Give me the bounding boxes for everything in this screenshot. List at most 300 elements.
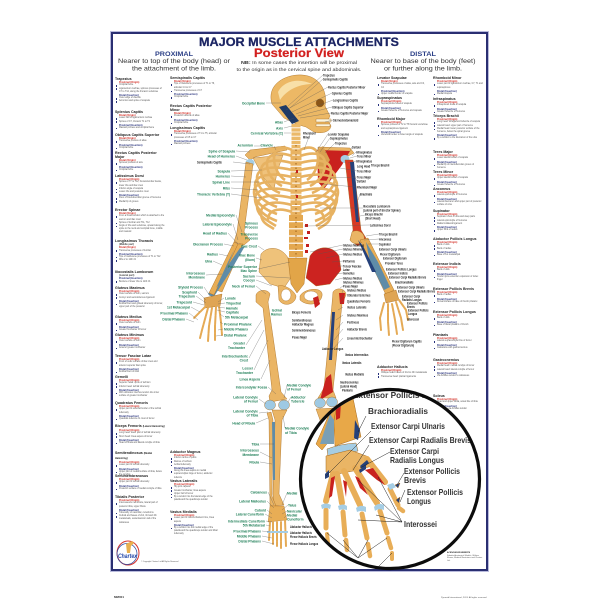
entry: Infraspinatus: Distal (Insertion): [437, 108, 457, 110]
entry: Gemelli: [115, 375, 160, 397]
black muscle labels: Brachioradialis: [395, 280, 414, 285]
black muscle labels: Longus: [408, 312, 418, 316]
entry: Gastrocnemius: [433, 358, 483, 378]
green bone labels, left side: Ribs: [223, 186, 230, 191]
entry: Levator Scapulae: Transverse processes of atlas, axis and C3, C4: [381, 83, 425, 88]
entry: Extensor Pollicis Longus: Distal (Insertion): [437, 320, 457, 324]
heading: proximal: PROXIMAL: [155, 52, 193, 58]
green bone labels, left side: Process: [245, 236, 258, 241]
entry: Biceps Femoris: Short head: linea aspera of femur: [119, 436, 152, 438]
entry: Obliquus Capitis Superior: Obliquus Capitis Superior: [115, 133, 159, 137]
entry: Semitendinosus: Lower part of ischial tuberosity: [119, 464, 149, 466]
black muscle labels: Iliocostalis Lumborum: [363, 204, 391, 209]
entry: Levator Scapulae: Upper medial border of scapula: [381, 93, 412, 95]
entry: Tibialis Posterior: Distal (Insertion): [119, 509, 139, 512]
entry: Teres Major: Medial lip of intertubercular groove of humerus: [437, 164, 474, 169]
printer note: Pyramid International, 2013. All rights reserved.: [441, 596, 487, 599]
heading: proximal: Nearer to top of the body (head) or: [118, 58, 230, 65]
entry: Supraspinatus: Distal (Insertion): [381, 106, 401, 110]
entry: Vastus Medialis: Proximal (Origin): [174, 514, 194, 517]
black muscle labels: Supinator: [379, 242, 392, 247]
entry: Tensor Fasciae Latae: Distal (Insertion): [119, 368, 139, 371]
entry: Vastus Medialis: Lower part of intertrochanteric line, linea aspera: [174, 517, 214, 522]
black muscle labels: Gluteus Minimus: [343, 280, 364, 285]
black muscle labels: [197, 73, 436, 546]
entry: Triceps Brachii: Triceps Brachii: [433, 114, 459, 118]
entry: Infraspinatus: Infraspinous fossa of scapula: [437, 104, 466, 106]
black muscle labels: Rhomboid: [303, 131, 316, 136]
skull: [271, 75, 331, 133]
entry: Obliquus Capitis Superior: [115, 133, 160, 149]
black muscle labels: Levator Scapulae: [328, 132, 349, 137]
black muscle labels: Latissimus Dorsi: [370, 223, 391, 228]
entry: Tensor Fasciae Latae: Front of outer surface of iliac crest and anterior superior iliac spine: [119, 361, 157, 366]
entry: Teres Minor: Greater tubercle of humerus: [437, 184, 465, 186]
green bone labels, left side: Radius: [207, 252, 218, 257]
entry: Semitendinosus: Semitendinosus (Medial Hamstring): [115, 451, 152, 460]
green bone labels, centre: Distal Phalanx: [224, 333, 247, 338]
pelvis: [259, 248, 341, 308]
entry: Tensor Fasciae Latae: [115, 354, 158, 373]
entry: Vastus Lateralis: Hip joint capsule: [174, 486, 191, 488]
green bone labels, centre: of Tibia: [285, 431, 298, 435]
entry: Gluteus Medius: [115, 315, 146, 331]
black muscle labels: Biceps Brachii: [365, 212, 383, 217]
green bone labels, centre: Middle Phalanx: [224, 327, 248, 332]
black muscle labels: Brevis: [407, 305, 415, 309]
entry: Extensor Pollicis Longus: Extensor Pollicis Longus: [433, 310, 476, 314]
green bone labels, left side: 5th Metatarsal: [243, 523, 265, 528]
black muscle labels: Abductor Hallucis: [290, 531, 312, 535]
panel: proximal column one: [115, 77, 178, 566]
entry: Gluteus Minimus: Outer surface of ilium: [119, 340, 140, 342]
entry: Semimembranosus: Upper part of ischial tuberosity: [119, 481, 149, 483]
green bone labels, left side: Humerus: [216, 174, 230, 179]
heading: distal: DISTAL: [410, 52, 436, 58]
entry: Teres Minor: Distal (Insertion): [437, 180, 457, 184]
entry: Vastus Lateralis: Vastus Lateralis: [170, 479, 197, 483]
green bone labels, centre: 5th Metacarpal: [225, 315, 248, 320]
black muscle labels: Biceps Femoris: [292, 310, 311, 315]
black muscle labels: Trapezius: [335, 141, 347, 146]
entry: Longissimus Capitis: [170, 126, 217, 145]
enlarged hand skeleton: [316, 390, 471, 567]
entry: Soleus: [433, 394, 483, 411]
entry: Anconeus: Distal (Insertion): [437, 198, 457, 200]
circle labels: Interossei: [404, 519, 437, 529]
black muscle labels: Extensor Carpi Radialis Brevis: [389, 275, 427, 280]
entry: Iliocostalis Lumborum: (Lateral part): [119, 274, 134, 277]
green bone labels, centre: Capitate: [226, 310, 239, 315]
heading: proximal: the attachment of the limb.: [132, 66, 216, 72]
green bone labels, left side: Calcaneus: [250, 490, 267, 495]
entry: Levator Scapulae: Levator Scapulae: [377, 76, 407, 80]
entry: Supinator: Proximal (Origin): [437, 213, 457, 216]
black muscle labels: Extensor Digitorum: [383, 256, 407, 261]
green bone labels, left side: Atlas: [275, 120, 283, 125]
entry: Gluteus Maximus: Gluteus Maximus: [115, 286, 145, 290]
entry: Longissimus Thoracis: Transverse processes of lumbar: [119, 250, 151, 252]
entry: Gluteus Maximus: Distal (Insertion): [119, 300, 139, 303]
green bone labels, left side: Thoracic Vertebra (T): [197, 192, 231, 197]
left hand: [194, 306, 222, 341]
green bone labels, left side: Iliac Spine: [241, 269, 257, 273]
black muscle labels: Vastus Lateralis: [347, 305, 367, 310]
green bone labels, left side: Interosseus: [186, 271, 205, 276]
entry: Trapezius: Outer edge of clavicle: [119, 97, 141, 99]
green bone labels, centre: Navicular: [287, 509, 302, 514]
entry: Longissimus Thoracis: Distal (Origin): [119, 246, 136, 249]
black muscle labels: Gluteus Medius: [343, 276, 362, 281]
green bone labels, left side: Iliac Crest: [241, 244, 258, 249]
green bone labels, left side: Linea Aspera: [240, 377, 261, 382]
right arm: [345, 160, 399, 303]
entry: Abductor Pollicis Longus: Proximal (Origin): [437, 241, 457, 244]
green bone labels, left side: Intertrochanteric: [222, 354, 248, 359]
magnifier circle: hand detail: [300, 390, 480, 568]
entry: Splenius Capitis: [115, 110, 154, 129]
green bone labels, left side: of Tibia: [246, 413, 259, 418]
copyright: © Copyright Chartex Ltd All Rights Reserved: [141, 561, 178, 563]
entry: Abductor Pollicis Longus: Back of radius: [437, 248, 451, 250]
entry: Splenius Capitis: Mastoid process and occipital bone: [119, 127, 154, 129]
title: MAJOR MUSCLE ATTACHMENTS: [199, 37, 399, 49]
entry: Semispinalis Capitis: [170, 76, 215, 99]
green bone labels, left side: Greater: [233, 341, 246, 346]
green bone labels, left side: Middle Phalanx: [237, 534, 261, 539]
entry: Rectus Capitis Posterior Major: [115, 151, 157, 171]
poster frame: [111, 32, 488, 571]
entry: Tibialis Posterior: Tuberosity of navicular, cuneiforms: [119, 512, 154, 514]
entry: Adductor Magnus: Along the linea aspera to medial supracondylar ridge of femur, adductor tubercle: [174, 470, 213, 479]
black muscle labels: Infraspinatus: [356, 159, 372, 164]
circle labels: Extensor Carpi Radialis Brevis: [369, 435, 471, 445]
black muscle labels: Semispinalis Capitis: [197, 160, 222, 165]
entry: Gluteus Maximus: Proximal (Origin): [119, 290, 139, 293]
panel: distal column two: [433, 76, 483, 562]
entry: Extensor Pollicis Brevis: Distal (Insertion): [437, 298, 457, 300]
entry: Plantaris: Proximal (Origin): [437, 337, 457, 340]
entry: Trapezius: Ligamentum nuchae, spinous processes of C7 to T12, along the thoracic vertebrae: [119, 88, 162, 93]
entry: Teres Minor: Upper lateral border of scapula: [437, 177, 468, 179]
entry: Biceps Femoris: [115, 424, 165, 444]
entry: Tibialis Posterior: Proximal (Origin): [119, 499, 139, 502]
entry: Obliquus Capitis Superior: Transverse process of atlas: [119, 140, 147, 142]
entry: Gemelli: Superior head: spine of ischium: [119, 382, 151, 384]
green bone labels, left side: Trochanter: [236, 371, 254, 375]
black muscle labels: Extensor Carpi Radialis Brevis: [398, 289, 436, 294]
entry: Quadratus Femoris: Distal (Insertion): [119, 415, 139, 418]
black muscle labels: Extensor Pollicis: [408, 308, 429, 313]
entry: Rhomboid Major: Vertebral border to lower angle of scapula: [381, 134, 423, 136]
green bone labels, centre: Proximal Phalanx: [224, 322, 252, 327]
entry: Extensor Indicis: Proximal (Origin): [437, 266, 457, 269]
entry: Supinator: Supinator: [433, 209, 450, 213]
black muscle labels: Semimembranosus: [292, 328, 316, 333]
entry: Quadratus Femoris: Quadratus Femoris: [115, 401, 148, 405]
entry: Soleus: Head and upper fibula, soleal line of tibia: [437, 401, 478, 403]
entry: acknowledgements: Sobotta Anatomical Models, Wolters Kluwer, Medical Illustrators and Chartex Ltd.: [447, 555, 482, 562]
green bone labels, left side: Neck of Femur: [232, 284, 256, 289]
panel: distal column one: [377, 76, 428, 378]
entry: Gluteus Medius: Gluteus Medius: [115, 315, 142, 319]
entry: Vastus Medialis: Distal (Insertion): [174, 524, 194, 527]
circle labels: Radialis Longus: [390, 455, 444, 465]
entry: Semitendinosus: [115, 451, 162, 476]
black muscle labels: Piriformis: [343, 259, 355, 264]
entry: Quadratus Femoris: [115, 401, 161, 420]
entry: Supinator: Supinator crest of ulna and deep parts: [437, 216, 475, 218]
entry: Rhomboid Minor: Lower part of ligamentum nuchae, C7, T1 and supraspinous: [437, 83, 483, 88]
black muscle labels: Adductor Longus: [322, 347, 344, 351]
entry: Teres Major: Teres Major: [433, 150, 453, 154]
entry: Rectus Capitis Posterior Minor: Distal (Origin): [174, 112, 191, 115]
black muscle labels: Tensor Fasciae: [343, 264, 362, 269]
note: [236, 60, 362, 72]
entry: Plantaris: Distal (Insertion): [437, 344, 457, 346]
entry: Quadratus Femoris: Quadrate tubercle on crest of femur: [119, 418, 155, 420]
entry: Adductor Hallucis: Proximal (Origin): [381, 369, 401, 372]
green bone labels, centre: Tubercle: [291, 399, 305, 404]
entry: Abductor Pollicis Longus: Back of ulna: [437, 244, 449, 246]
entry: Vastus Medialis: Vastus Medialis: [170, 510, 197, 514]
black muscle labels: Flexor Digitorum Capitis: [392, 339, 422, 344]
black muscle labels: Extensor Pollicis: [407, 301, 428, 306]
entry: Supinator: Upper third of radius: [437, 229, 457, 231]
entry: Tibialis Posterior: Interosseous membrane, lateral part of posterior tibia, upper fibula: [119, 502, 158, 508]
entry: Rhomboid Minor: Proximal (Origin): [437, 80, 457, 83]
entry: Iliocostalis Lumborum: Borders of lower ribs to 12th rib: [119, 280, 150, 282]
entry: Supinator: Radial collateral ligament: [437, 223, 462, 225]
green bone labels, left side: Lesser: [242, 366, 254, 371]
circle labels: Brevis: [404, 475, 426, 485]
entry: Gemelli: With obturator internus tendon into inner surface of greater trochanter: [119, 392, 159, 397]
entry: Adductor Hallucis: Transverse head: plantar ligaments: [381, 376, 416, 378]
entry: Longissimus Thoracis: (Middle part): [119, 243, 134, 246]
entry: Gemelli: Inferior head: ischial tuberosity: [119, 386, 150, 388]
green bone labels, left side: Occipital Bone: [242, 101, 265, 106]
circle labels: Extensor Carpi Ulnaris: [371, 421, 445, 431]
entry: Rhomboid Major: Distal (Insertion): [381, 131, 401, 134]
entry: Biceps Femoris: Biceps Femoris (Lateral Hamstring): [115, 424, 165, 428]
black muscle labels: Quadratus Femoris: [347, 299, 371, 304]
black muscle labels: Adductor Brevis: [347, 327, 367, 332]
entry: Trapezius: Trapezius: [115, 77, 132, 81]
entry: Vastus Lateralis: By a tendon into the lateral edge of the patella and the quadriceps tendon: [174, 496, 213, 501]
circle labels: [353, 390, 471, 529]
black muscle labels: Extensor Carpi Ulnaris: [379, 247, 407, 252]
left leg: [256, 290, 290, 506]
entry: Latissimus Dorsi: Spines of T7 to T12, thoracolumbar fascia, lower ribs and iliac crest: [119, 181, 161, 186]
entry: Adductor Magnus: [170, 450, 213, 479]
shoulder girdle: [245, 146, 354, 190]
black muscle labels: Gemellus: [343, 271, 355, 276]
entry: Anconeus: Anconeus: [433, 187, 450, 191]
entry: Rectus Capitis Posterior Major: Distal (Origin): [119, 159, 136, 162]
entry: Longissimus Capitis: Longissimus Capitis: [170, 126, 205, 130]
entry: Splenius Capitis: Distal (Origin): [119, 114, 136, 117]
entry: Vastus Lateralis: Upper half of femur: [174, 493, 193, 495]
entry: Latissimus Dorsi: Lower ribs and posterior crest: [119, 191, 149, 193]
green bone labels, left side: Styloid Process: [178, 285, 203, 290]
entry: Longissimus Capitis: Mastoid process: [174, 143, 190, 145]
subtitle: Posterior View: Posterior View: [254, 46, 345, 60]
entry: Gluteus Minimus: Anterior greater trochanter: [119, 347, 145, 349]
entry: Longissimus Thoracis: Longissimus Thoracis: [115, 239, 153, 243]
entry: Teres Major: Lower lateral border of scapula: [437, 157, 468, 159]
black muscle labels: Flexor Hallucis Longus: [290, 542, 318, 546]
green bone labels, left side: Trochanter: [228, 346, 246, 350]
black muscle labels: Minor: [303, 135, 311, 140]
green bone labels, centre: Lunate: [225, 296, 236, 301]
entry: Infraspinatus: [433, 97, 466, 113]
green bone labels, left side: Spine of Scapula: [209, 149, 236, 154]
green bone labels, left side: Ramus: [271, 312, 282, 317]
circle labels: Extensor Pollicis: [404, 466, 460, 476]
skeleton figure: [186, 75, 408, 548]
entry: Rectus Capitis Posterior Minor: Posterior tubercle of atlas: [174, 115, 200, 117]
black muscle labels: Supraspinatus: [330, 136, 348, 141]
entry: Rectus Capitis Posterior Major: Proximal (Insertion): [119, 166, 142, 169]
entry: Soleus: Soleus: [433, 394, 445, 398]
black muscle labels: Gastrocnemius: [340, 380, 359, 385]
black muscle labels: Flexor Digitorum: [380, 252, 401, 257]
entry: Semispinalis Capitis: Occipital bone: [174, 96, 188, 98]
green bone labels, left side: Spinal Line: [212, 180, 230, 185]
entry: Gastrocnemius: Gastrocnemius: [433, 358, 459, 362]
green bone labels, left side: Clavicle: [260, 143, 273, 148]
entry: Longissimus Thoracis: Proximal (Insertion): [119, 253, 142, 256]
entry: Extensor Indicis: Distal (Insertion): [437, 272, 457, 276]
entry: Teres Major: Distal (Insertion): [437, 160, 457, 164]
entry: Plantaris: Lateral supracondylar line of femur: [437, 340, 472, 342]
entry: Gluteus Minimus: Proximal (Origin): [119, 337, 139, 340]
green bone labels, left side: Lateral Condyle: [233, 395, 258, 400]
entry: Longissimus Thoracis: [115, 239, 160, 262]
green bone labels, left side: Cervical Vertebra (C): [251, 131, 284, 136]
green bone labels, left side: Ulna: [205, 259, 213, 264]
entry: Biceps Femoris: Proximal (Origin): [119, 429, 139, 432]
entry: Rectus Capitis Posterior Major: Occipital bone: [119, 169, 133, 171]
entry: Obliquus Capitis Superior: Distal (Origin): [119, 137, 136, 140]
black muscle labels: Brachialis: [360, 192, 373, 197]
black muscle labels: Linea Intertrochanter: [347, 336, 373, 341]
leader lines in circle: [326, 416, 405, 567]
green bone labels, left side: Lateral Condyle: [233, 409, 258, 414]
entry: Gemelli: Proximal (Origin): [119, 379, 139, 382]
entry: Extensor Pollicis Longus: [433, 310, 483, 327]
entry: Rectus Capitis Posterior Major: Rectus Capitis Posterior Major: [115, 151, 157, 159]
entry: Vastus Medialis: [170, 510, 218, 535]
entry: Vastus Lateralis: [170, 479, 213, 501]
entry: Tibialis Posterior: Cuboid and bases of 2nd, 3rd and 4th metatarsals, sustentaculum tali of the calcaneus: [119, 515, 157, 524]
black muscle labels: Semispinalis Capitis: [323, 77, 348, 82]
black muscle labels: Vastus Intermedius: [345, 353, 369, 357]
entry: Gluteus Maximus: Coccyx and sacrotuberous ligament: [119, 296, 155, 298]
entry: Extensor Pollicis Longus: Back of ulna: [437, 317, 449, 319]
entry: Splenius Capitis: Splenius Capitis: [115, 110, 143, 114]
entry: Iliocostalis Lumborum: [115, 270, 154, 283]
entry: Triceps Brachii: Distal (Insertion): [437, 134, 457, 137]
entry: Rhomboid Minor: [433, 76, 483, 95]
black muscle labels: Vastus Lateralis: [342, 361, 362, 365]
entry: Tibialis Posterior: [115, 495, 158, 524]
entry: Semimembranosus: Posterior surface of medial condyle of tibia: [119, 488, 161, 490]
product code: MM001: [114, 595, 124, 599]
green bone labels, left side: Cuboid: [255, 508, 266, 513]
entry: Rhomboid Minor: Distal (Insertion): [437, 90, 457, 93]
green bone labels, left side: of Femur: [244, 399, 259, 404]
circle labels: Extensor Carpi: [390, 446, 439, 456]
entry: Extensor Pollicis Brevis: [433, 287, 483, 304]
entry: Longissimus Capitis: Transverse processes of T1 to T5, articular processes of C5 to C7: [174, 133, 217, 138]
entry: Soleus: Calcaneus via Achilles tendon: [437, 408, 467, 410]
green bone labels, left side: Distal Phalanx: [162, 317, 185, 322]
green bone labels, left side: Crest: [240, 358, 249, 363]
green bone labels, centre: Medial: [287, 491, 297, 496]
entry: Latissimus Dorsi: Medial lip of groove: [119, 201, 139, 203]
entry: Gluteus Maximus: Iliotibial tract and gluteal tuberosity of femur, upper part of the posterior: [119, 303, 163, 308]
entry: Gluteus Maximus: [115, 286, 163, 308]
black muscle labels: Pronator Teres: [385, 261, 403, 266]
entry: Erector Spinae: From a broad tendon which is attached to the sacrum and iliac crest: [119, 215, 164, 220]
entry: Adductor Magnus: Ischial tuberosity: [174, 464, 191, 466]
entry: Triceps Brachii: By a tendon to the olecranon of the ulna: [437, 137, 477, 139]
entry: Teres Minor: Teres Minor: [433, 170, 453, 174]
entry: Semitendinosus: Proximal (Origin): [119, 461, 139, 464]
entry: Soleus: Proximal (Origin): [437, 398, 457, 401]
magnifier ring: [300, 390, 480, 568]
entry: Semispinalis Capitis: Transverse processes of C7: [174, 90, 202, 92]
entry: Longissimus Thoracis: Tips of transverse processes of T1 to T12: [119, 256, 160, 258]
entry: Gemelli: Distal (Insertion): [119, 389, 139, 392]
black muscle labels: Gluteus Minimus: [343, 247, 364, 252]
entry: Gastrocnemius: Proximal (Origin): [437, 362, 457, 365]
black muscle labels: Long Head: [357, 164, 370, 169]
entry: Extensor Pollicis Longus: Proximal (Origin): [437, 314, 457, 317]
green bone labels, left side: [160, 101, 284, 544]
right leg: [314, 289, 346, 460]
entry: Trapezius: Distal (Insertion): [119, 94, 139, 97]
green bone labels, left side: Membrane: [242, 453, 259, 457]
green bone labels, centre: Medial: [287, 513, 297, 518]
entry: Levator Scapulae: Proximal (Insertion): [381, 90, 404, 93]
entry: Gastrocnemius: Medial head: medial condyle of femur: [437, 365, 474, 367]
black muscle labels: Sternocleidomastoid: [333, 118, 358, 123]
green bone labels, left side: Trapezium: [179, 294, 195, 299]
circle labels: Longus: [407, 496, 431, 506]
entry: Plantaris: Plantaris: [433, 333, 448, 337]
green bone labels, left side: Acromion: [238, 143, 253, 148]
entry: Adductor Magnus: Distal (Insertion): [174, 467, 194, 470]
entry: Longissimus Capitis: Proximal (Insertion): [174, 140, 197, 143]
logo: Chartex: [118, 554, 138, 560]
entry: Gastrocnemius: Distal (Insertion): [437, 372, 457, 375]
green bone labels, left side: Head of Humerus: [208, 154, 235, 159]
black muscle labels: Abductor Hallucis: [290, 525, 312, 529]
green bone labels, centre: Cuneiform: [287, 517, 304, 522]
entry: Supraspinatus: Supraspinous fossa of scapula: [381, 103, 412, 105]
leader lines: [186, 75, 379, 544]
black muscle labels: Latae: [343, 268, 350, 272]
entry: Supinator: Distal (Insertion): [437, 226, 457, 229]
green bone labels, left side: Lateral Cuneiform: [236, 512, 264, 517]
green bone labels, left side: Interosseus: [240, 448, 259, 453]
entry: Gluteus Minimus: Gluteus Minimus: [115, 333, 144, 337]
green bone labels, left side: Scapula: [217, 169, 231, 174]
green bone labels, left side: Process: [245, 225, 258, 230]
black muscle labels: Trapezius: [323, 73, 335, 78]
